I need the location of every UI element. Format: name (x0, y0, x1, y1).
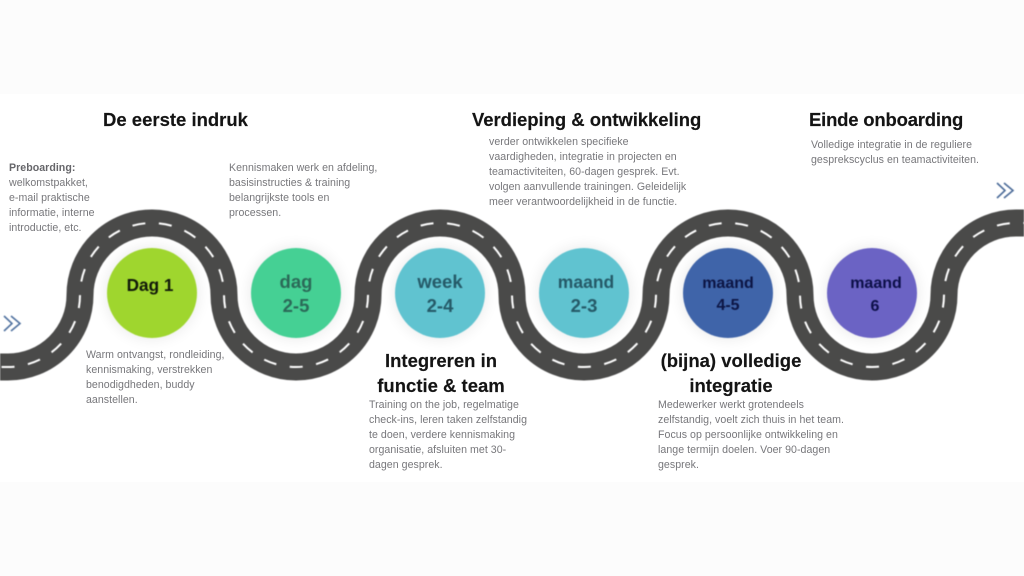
text: volledige integratie: zelfstandig, voelt zich thuis in het team. (658, 414, 844, 426)
text: integreren: dagen gesprek. (369, 459, 443, 471)
text: integreren: check-ins, leren taken zelfstandig (369, 414, 527, 426)
circle: maand 2-3 (537, 246, 631, 340)
text: integreren (369, 399, 527, 471)
circle: Dag 1: Dag 1 (127, 275, 174, 295)
winding road (0, 223, 1024, 367)
heading: (bijna) volledige integratie: integratie (689, 375, 773, 396)
circle: maand 4-5 (681, 246, 775, 340)
circle: week 2-4: 2-4 (427, 295, 454, 316)
text: integreren: te doen, verdere kennismaking (369, 429, 515, 441)
circle: week 2-4 (393, 246, 487, 340)
heading: Einde onboarding: Einde onboarding (809, 109, 963, 130)
text: volledige integratie: Focus op persoonlijke ontwikkeling en (658, 429, 838, 441)
heading: Integreren in functie & team: functie & team (377, 375, 505, 396)
text: volledige integratie: Medewerker werkt grotendeels (658, 399, 804, 411)
text: dag 2-5: processen. (229, 207, 281, 219)
circle: dag 2-5: dag (280, 271, 312, 292)
heading: Integreren in functie & team (377, 350, 505, 396)
text: verdieping: vaardigheden, integratie in projecten en (489, 151, 677, 163)
text: integreren: Training on the job, regelmatige (369, 399, 519, 411)
text: einde onboarding: Volledige integratie in de reguliere (811, 139, 972, 151)
text: preboarding: Preboarding: (9, 162, 75, 174)
text: preboarding: introductie, etc. (9, 222, 82, 234)
text: verdieping: volgen aanvullende trainingen. Geleidelijk (489, 181, 686, 193)
text: volledige integratie: lange termijn doelen. Voer 90-dagen (658, 444, 830, 456)
circle: maand 4-5: 4-5 (716, 297, 740, 314)
circle: maand 4-5: maand (702, 275, 754, 292)
circle: maand 6: 6 (871, 298, 880, 315)
text: dag 1: Warm ontvangst, rondleiding, (86, 349, 225, 361)
circle: Dag 1 (105, 246, 199, 340)
circle: dag 2-5: 2-5 (283, 295, 309, 316)
text: preboarding (9, 162, 95, 234)
text: dag 2-5: basisinstructies & training (229, 177, 350, 189)
text: dag 2-5: Kennismaken werk en afdeling, (229, 162, 377, 174)
circle: maand 6 (825, 246, 919, 340)
text: integreren: organisatie, afsluiten met 30- (369, 444, 506, 456)
icon: start chevrons (4, 316, 20, 331)
circle: maand 6: maand (850, 275, 902, 292)
text: preboarding: informatie, interne (9, 207, 95, 219)
circle: maand 2-3: maand (558, 272, 614, 292)
text: einde onboarding (811, 139, 979, 166)
text: volledige integratie (658, 399, 844, 471)
heading: Verdieping & ontwikkeling: Verdieping & ontwikkeling (472, 109, 701, 130)
icon: end chevrons (997, 183, 1013, 198)
circle: week 2-4: week (416, 271, 463, 292)
text: dag 2-5: belangrijkste tools en (229, 192, 329, 204)
heading: (bijna) volledige integratie: (bijna) volledige (661, 350, 801, 371)
text: preboarding: e-mail praktische (9, 192, 90, 204)
text: einde onboarding: gesprekscyclus en teamactiviteiten. (811, 154, 979, 166)
text: dag 2-5 (229, 162, 377, 219)
text: volledige integratie: gesprek. (658, 459, 699, 471)
text: verdieping: teamactiviteiten, 60-dagen gesprek. Evt. (489, 166, 680, 178)
text: dag 1 (86, 349, 225, 406)
text: preboarding: welkomstpakket, (9, 177, 88, 189)
text: verdieping (489, 136, 686, 208)
text: dag 1: aanstellen. (86, 394, 138, 406)
text: dag 1: kennismaking, verstrekken (86, 364, 212, 376)
circle: maand 2-3: 2-3 (571, 295, 597, 316)
circle: dag 2-5 (249, 246, 343, 340)
heading: Integreren in functie & team: Integreren in (385, 350, 497, 371)
background band (0, 94, 1024, 482)
heading: De eerste indruk: De eerste indruk (103, 109, 248, 130)
text: dag 1: benodigdheden, buddy (86, 379, 195, 391)
heading: (bijna) volledige integratie (661, 350, 801, 396)
text: verdieping: meer verantwoordelijkheid in de functie. (489, 196, 677, 208)
text: verdieping: verder ontwikkelen specifieke (489, 136, 629, 148)
